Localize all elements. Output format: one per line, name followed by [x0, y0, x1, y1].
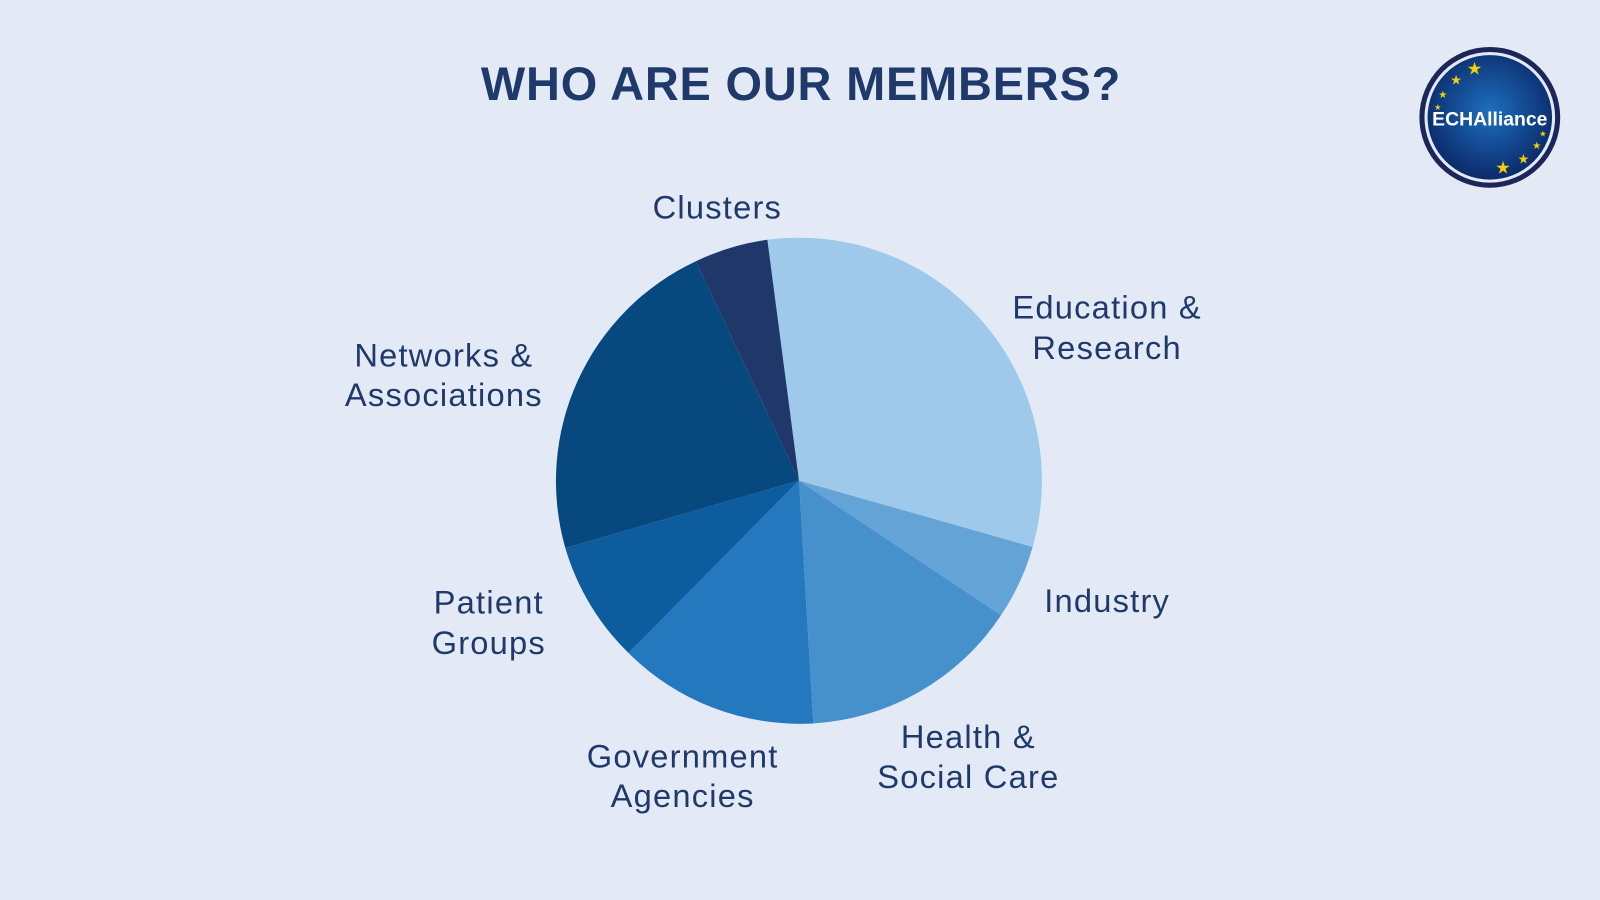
- label: Education & Research: Research: [1032, 329, 1182, 366]
- label: Patient Groups: Patient: [434, 583, 544, 620]
- logo: ECHAlliance: ★: [1434, 103, 1441, 112]
- slice: Clusters: [696, 240, 799, 481]
- slice: Industry: [799, 481, 1033, 615]
- logo: ECHAlliance: ★: [1539, 130, 1547, 139]
- logo: ECHAlliance: ★: [1467, 58, 1482, 78]
- logo: ECHAlliance: ★: [1532, 141, 1541, 152]
- label: Government Agencies: Government: [587, 737, 779, 774]
- label: Industry: Industry: [1044, 582, 1170, 619]
- label: Patient Groups: Groups: [432, 624, 546, 661]
- slice: Government Agencies: [629, 481, 813, 724]
- slice: Education & Research: [767, 238, 1042, 547]
- labels: [345, 188, 1202, 814]
- label: Networks & Associations: Networks &: [354, 336, 533, 373]
- pie chart: [556, 238, 1042, 724]
- label: Networks & Associations: Associations: [345, 376, 543, 413]
- label: Government Agencies: Agencies: [611, 777, 755, 814]
- logo: ECHAlliance: ECHAlliance: [1432, 109, 1548, 131]
- logo: ECHAlliance: ★: [1495, 157, 1511, 177]
- logo: ECHAlliance: ★: [1438, 90, 1447, 101]
- logo: ECHAlliance: ★: [1518, 151, 1530, 166]
- slice: Networks & Associations: [556, 261, 799, 548]
- slice: Patient Groups: [565, 481, 799, 653]
- label: Health & Social Care: Social Care: [877, 758, 1059, 795]
- label: Health & Social Care: Health &: [901, 718, 1036, 755]
- slice: Health & Social Care: [799, 481, 1001, 723]
- logo: ECHAlliance: [1419, 47, 1560, 188]
- label: Education & Research: Education &: [1012, 288, 1202, 325]
- title: WHO ARE OUR MEMBERS?: [481, 58, 1121, 110]
- label: Clusters: Clusters: [653, 188, 782, 225]
- logo: ECHAlliance: ★: [1450, 73, 1462, 88]
